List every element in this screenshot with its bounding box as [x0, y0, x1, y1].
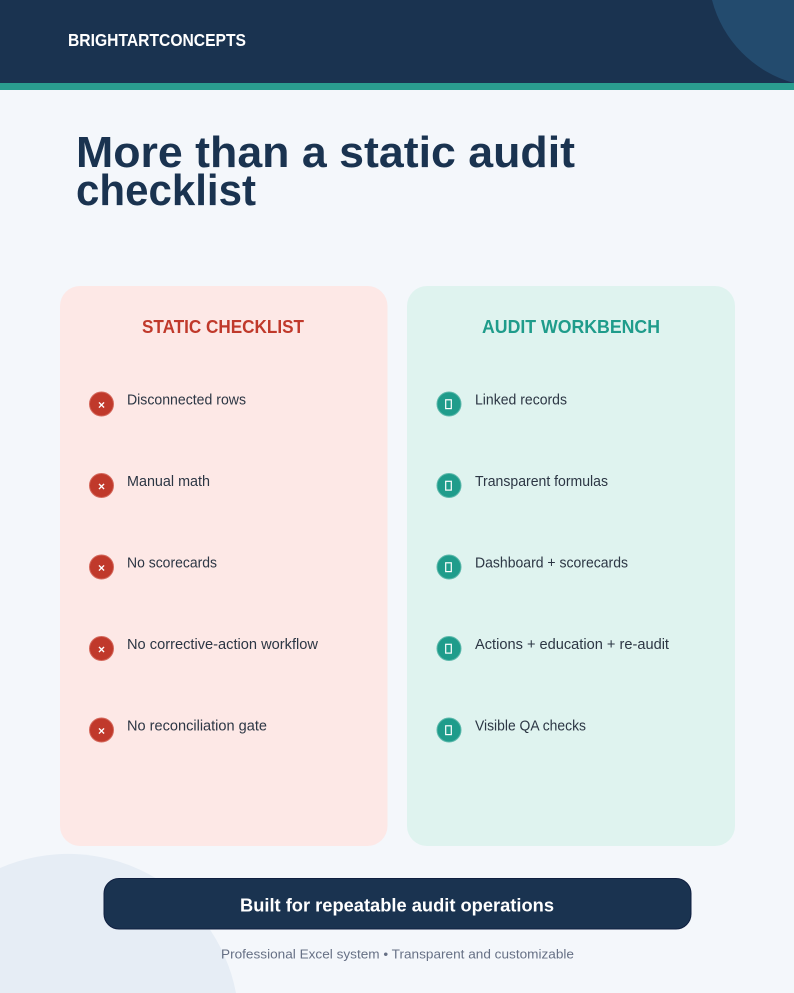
list item: no scorecards: [90, 555, 217, 579]
brand name: BRIGHTARTCONCEPTS: [68, 30, 246, 50]
list item: no reconciliation gate: No reconciliation gate: [127, 718, 267, 734]
list item: no reconciliation gate: [90, 718, 267, 742]
list item: no reconciliation gate: ×: [98, 724, 105, 738]
list item: manual math: Manual math: [127, 474, 210, 490]
decorative circle: bottom left: [0, 854, 236, 993]
panel: static checklist: [60, 286, 388, 846]
panel heading: static checklist: STATIC CHECKLIST: [142, 316, 305, 337]
list item: manual math: [90, 474, 210, 498]
list item: disconnected rows: [90, 392, 246, 416]
callout banner: Built for repeatable audit operations: [240, 894, 554, 916]
callout banner: [104, 878, 691, 929]
list item: transparent formulas: [437, 474, 608, 498]
list item: linked records: Linked records: [475, 392, 567, 408]
list item: actions + education + re-audit: [437, 636, 669, 660]
title: [76, 129, 575, 215]
list item: actions + education + re-audit: Actions + education + re-audit: [475, 637, 669, 653]
list item: no corrective-action workflow: No corrective-action workflow: [127, 637, 319, 653]
header band: [0, 0, 794, 90]
title: More than a static audit: [76, 129, 575, 177]
list item: disconnected rows: ×: [98, 398, 105, 412]
list item: no corrective-action workflow: [90, 636, 319, 660]
title: checklist: [76, 167, 256, 215]
list item: dashboard + scorecards: [437, 555, 628, 579]
list item: visible qa checks: Visible QA checks: [475, 718, 586, 734]
list item: visible qa checks: [437, 718, 586, 742]
panel heading: audit workbench: AUDIT WORKBENCH: [482, 316, 660, 337]
footer text: Professional Excel system • Transparent and customizable: [221, 946, 574, 962]
list item: no scorecards: No scorecards: [127, 556, 217, 572]
panel: audit workbench: [407, 286, 735, 846]
list item: transparent formulas: Transparent formulas: [475, 474, 608, 490]
list item: no corrective-action workflow: ×: [98, 642, 105, 656]
list item: no scorecards: ×: [98, 561, 105, 575]
list item: dashboard + scorecards: Dashboard + scorecards: [475, 556, 628, 572]
list item: linked records: [437, 392, 567, 416]
list item: manual math: ×: [98, 480, 105, 494]
list item: disconnected rows: Disconnected rows: [127, 392, 246, 408]
